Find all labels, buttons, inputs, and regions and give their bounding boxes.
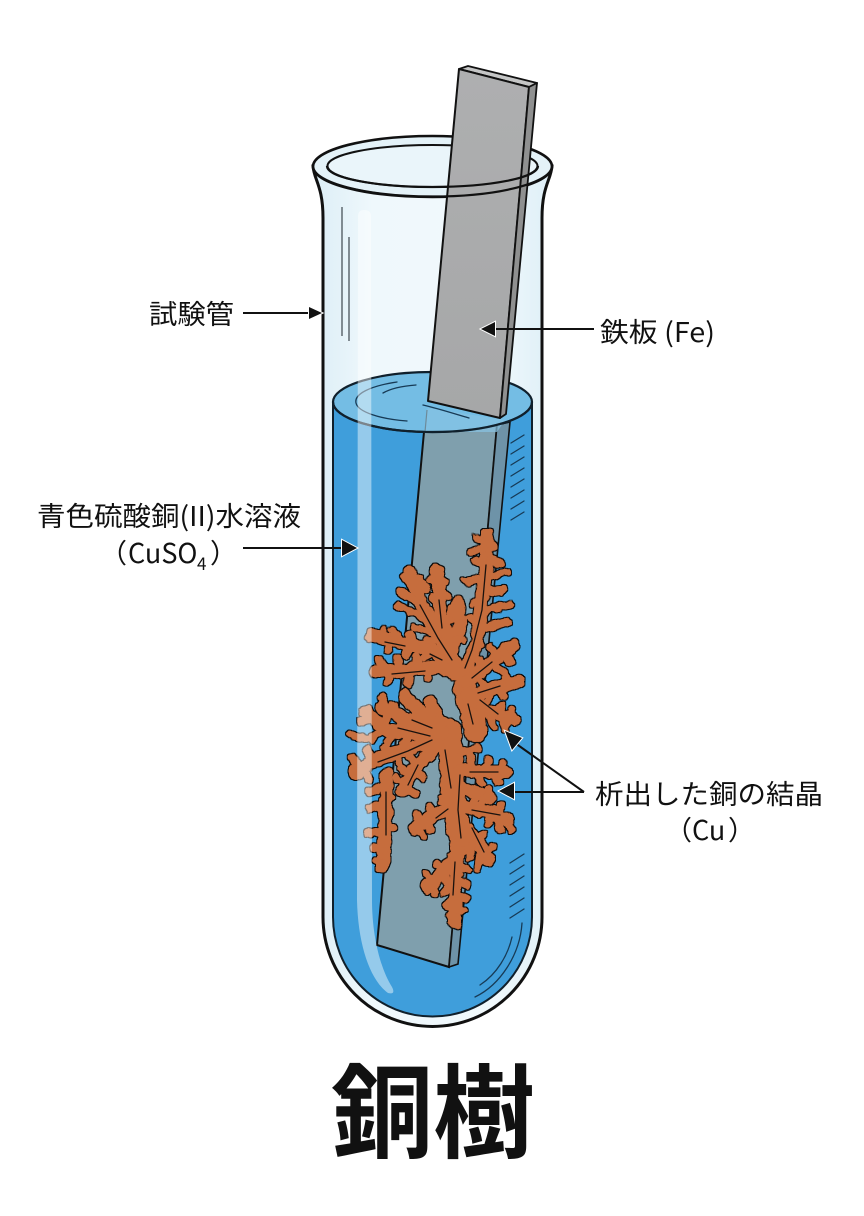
label: copper crystals: 析出した銅の結晶 xyxy=(595,773,823,812)
plate side face xyxy=(500,83,537,418)
arrow: iron plate xyxy=(481,322,594,336)
arrow: test tube xyxy=(243,307,322,319)
side hatch marks xyxy=(510,435,524,918)
label: copper crystals: （ xyxy=(665,809,692,848)
tube rim xyxy=(313,136,552,197)
label: copper sulfate solution xyxy=(37,495,357,575)
arrows: copper crystals xyxy=(499,731,584,799)
copper sulfate solution xyxy=(333,372,532,1016)
test tube xyxy=(313,136,552,1026)
rim front lines over plate xyxy=(313,166,552,196)
plate front face xyxy=(428,69,529,418)
label: iron plate: 鉄板 (Fe) xyxy=(600,311,715,350)
label: copper sulfate solution: 4 xyxy=(197,550,206,575)
label: test tube xyxy=(149,293,322,332)
label: copper crystals xyxy=(499,731,823,848)
crystal body xyxy=(351,535,517,922)
crystal veins xyxy=(378,565,500,895)
tube glass body xyxy=(313,166,552,1026)
label: test tube: 試験管 xyxy=(149,293,234,332)
copper crystals xyxy=(351,535,517,922)
plate top edge xyxy=(459,66,537,87)
liquid body xyxy=(333,402,532,1016)
label: copper sulfate solution: 青色硫酸銅(II)水溶液 xyxy=(37,495,301,534)
tube opening xyxy=(328,145,538,187)
label: copper sulfate solution: （ xyxy=(100,532,127,571)
liquid surface xyxy=(333,372,532,432)
submerged plate seen through surface xyxy=(425,408,505,432)
surface ripples xyxy=(356,382,469,421)
label: copper crystals: Cu xyxy=(692,809,725,848)
submerged iron plate xyxy=(377,410,510,967)
title: 銅樹 xyxy=(331,1033,535,1180)
glass streaks xyxy=(342,207,349,341)
glass highlight stripe xyxy=(357,210,393,993)
label: copper crystals: ） xyxy=(728,809,755,848)
arrow: solution xyxy=(243,540,357,556)
label: copper sulfate solution: ） xyxy=(210,532,237,571)
label: iron plate xyxy=(481,311,715,350)
bottom curved reflections xyxy=(475,923,522,997)
label: copper sulfate solution: CuSO xyxy=(128,532,197,571)
iron plate above the liquid xyxy=(313,66,552,418)
